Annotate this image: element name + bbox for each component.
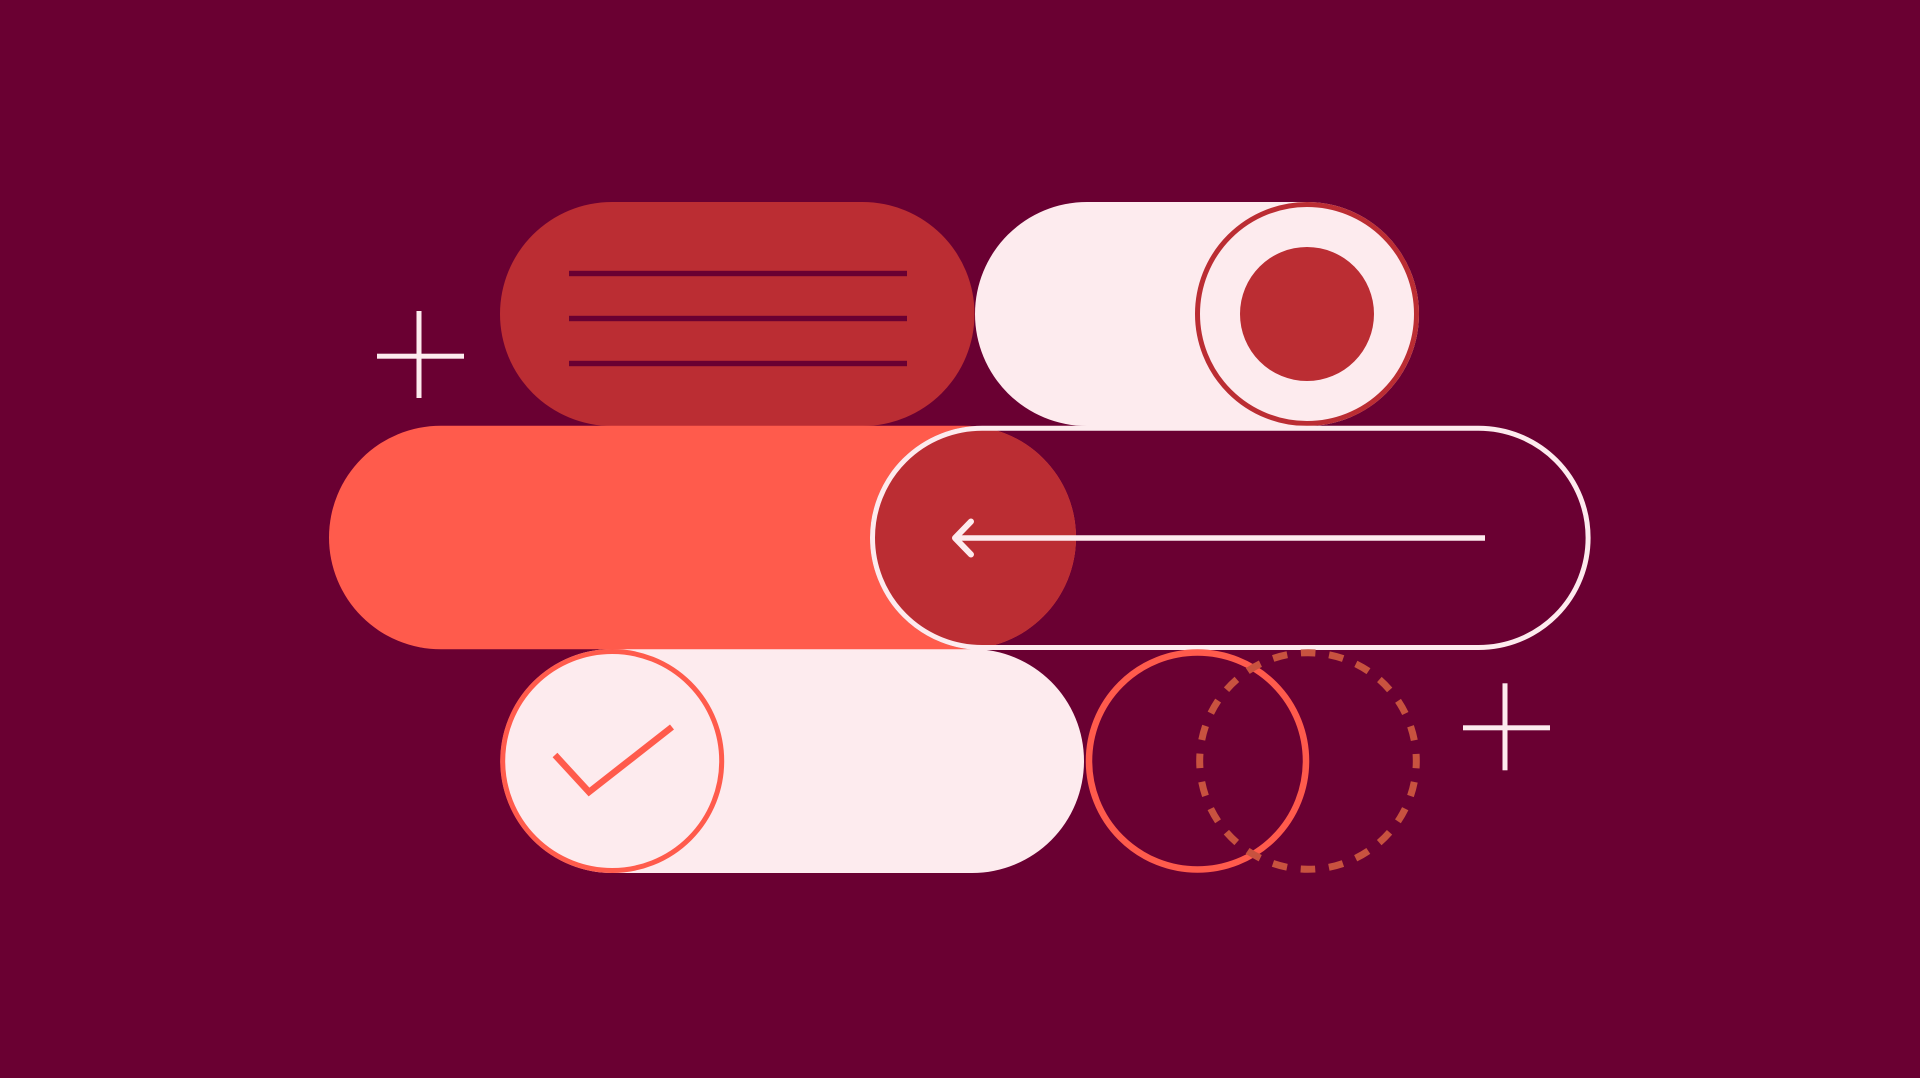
illustration: toggle switches on maroon background (329, 202, 1591, 873)
icon: right plus sign (1463, 683, 1550, 770)
icon: three lines (569, 271, 907, 366)
panel: cream toggle with check (500, 649, 1084, 873)
icon: left plus sign (377, 311, 464, 398)
panel: overlap lens between coral pill and outline pill (870, 426, 1076, 650)
icon: red knob dot (1240, 247, 1374, 381)
icon: dashed circle (1200, 653, 1416, 869)
icon: coral circle outline (1089, 652, 1306, 870)
panel: red pill with text lines (500, 202, 974, 426)
panel: cream toggle with red knob (975, 202, 1419, 426)
panel: outlined pill (872, 428, 1588, 648)
arrow: pointing left (955, 522, 1485, 554)
panel: coral pill (329, 426, 1076, 649)
icon: check knob ring (503, 652, 722, 870)
icon: toggle knob ring (1198, 204, 1416, 424)
icon: check mark (555, 727, 672, 792)
